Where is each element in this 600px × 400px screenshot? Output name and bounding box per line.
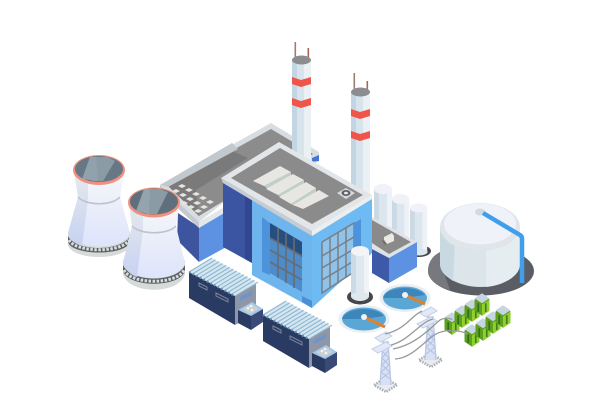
front face xyxy=(252,199,312,308)
tank pipe xyxy=(483,213,522,283)
power lines xyxy=(385,311,468,359)
chimney: right xyxy=(351,73,370,197)
rooftop fan xyxy=(337,188,355,199)
rooftop vents xyxy=(172,184,214,213)
right face xyxy=(312,197,372,308)
cooling tower: left xyxy=(68,155,130,257)
cooling tower: right xyxy=(123,188,185,290)
transformer: front xyxy=(263,301,337,373)
left dark face xyxy=(223,183,252,263)
window: side xyxy=(322,223,354,293)
front cylinder xyxy=(347,246,373,304)
pylon: rear xyxy=(417,307,442,367)
battery banks xyxy=(444,293,510,347)
annex building xyxy=(370,216,417,283)
chimney: left xyxy=(292,42,311,160)
door recess xyxy=(262,217,270,275)
storage tank xyxy=(428,203,534,296)
main building xyxy=(221,142,372,308)
storage cylinders xyxy=(374,184,431,257)
pylon: front xyxy=(372,332,397,392)
skylights xyxy=(253,166,329,209)
clarifier basin: front xyxy=(338,305,390,333)
back building wing xyxy=(160,123,319,262)
rooftop box xyxy=(382,233,394,245)
clarifier basin: rear xyxy=(380,284,430,312)
roof xyxy=(221,142,372,231)
window: front xyxy=(270,223,302,292)
transformer: rear xyxy=(189,258,263,330)
plant scene xyxy=(68,42,534,392)
